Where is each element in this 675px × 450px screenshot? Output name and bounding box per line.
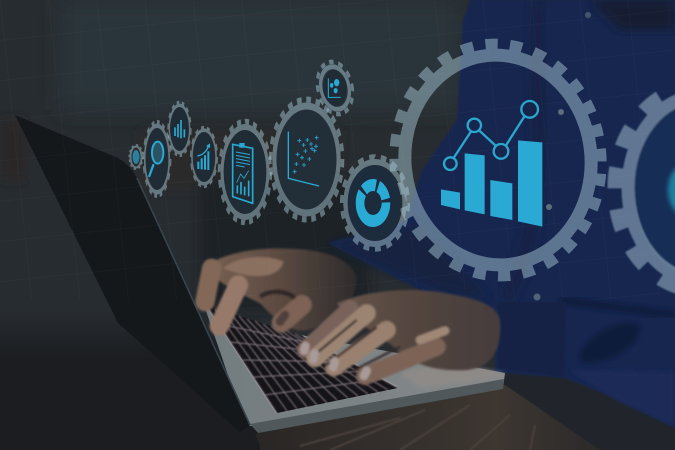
gear ring [385, 35, 611, 285]
gear: scatter plot [270, 100, 342, 220]
icon: clipboard [233, 143, 253, 203]
shirt [328, 0, 675, 428]
icon: bubble chart [328, 78, 341, 97]
icon: magnifying glass [149, 142, 163, 176]
gear: large bar and line chart [385, 35, 611, 285]
gear: far left tiny [130, 145, 142, 169]
gear: magnifier [143, 122, 171, 196]
laptop screen lid [15, 115, 250, 432]
icon: scatter chart [288, 132, 319, 186]
icon: donut [360, 185, 386, 221]
key grid lines [207, 306, 398, 413]
icon: candlesticks [175, 120, 184, 138]
gear: donut chart [342, 157, 408, 249]
finger creases [312, 320, 400, 371]
keyboard [207, 306, 398, 413]
small gears with icons [130, 58, 408, 249]
gear: small top bubble chart [313, 58, 357, 118]
gear: rising bar chart [191, 128, 217, 186]
fingernails [304, 346, 367, 376]
left hand [205, 248, 357, 331]
gear: candlestick chart [168, 102, 191, 156]
grid overlay [0, 0, 675, 300]
icon: bars and trend line [441, 101, 542, 227]
hands [205, 248, 500, 376]
right hand [304, 290, 500, 376]
gear: clipboard report [219, 122, 271, 222]
gear: far right blurred [615, 86, 675, 290]
dark floor lower right [480, 370, 675, 450]
icon: rising chart [197, 143, 210, 170]
wooden table [255, 385, 600, 450]
laptop base [205, 308, 505, 433]
